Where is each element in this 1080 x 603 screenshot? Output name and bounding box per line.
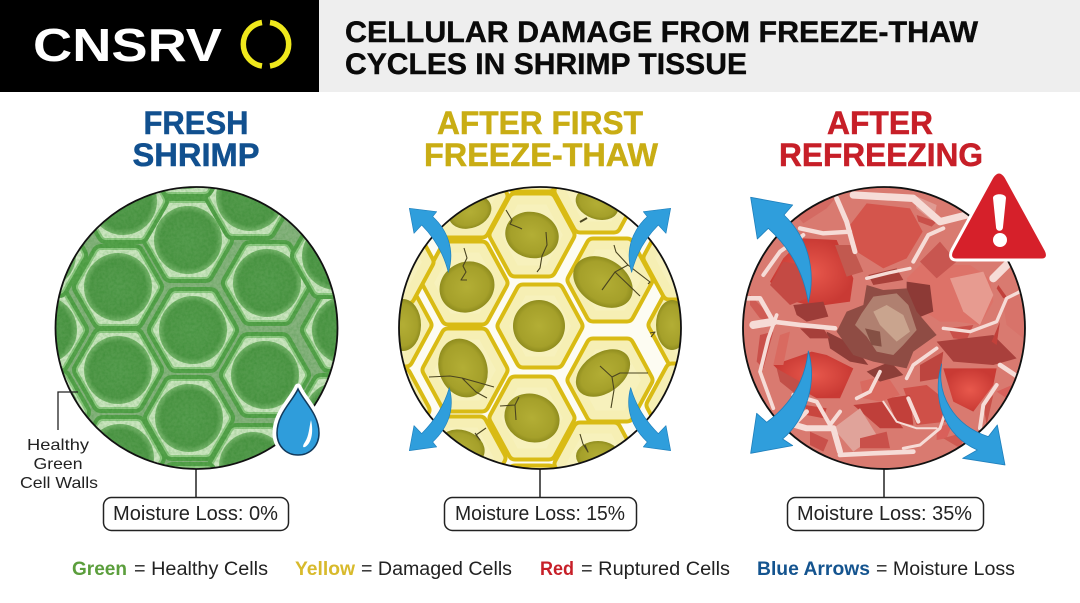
legend: green — [72, 559, 268, 580]
arrow: bottom right — [629, 388, 671, 451]
legend: green: Green — [72, 559, 127, 580]
icon: water drop — [276, 387, 320, 456]
legend: green: = Healthy Cells — [134, 559, 268, 580]
white fracture veins — [740, 195, 1027, 455]
panel: fresh shrimp — [20, 111, 338, 532]
label: healthy green cell walls: Cell Walls — [20, 475, 98, 492]
arrow: bottom right — [938, 364, 1005, 465]
arrow: bottom left — [751, 351, 811, 453]
panel: after refreezing — [740, 105, 1047, 530]
moisture loss arrows — [409, 208, 671, 451]
title: CELLULAR DAMAGE FROM FREEZE-THAW — [345, 16, 979, 49]
label: healthy green cell walls — [20, 437, 98, 492]
arrow: top right — [629, 208, 671, 272]
connector line — [195, 468, 197, 498]
heading: after first freeze-thaw — [424, 105, 659, 173]
heading: fresh shrimp — [132, 105, 260, 173]
legend: blue arrows: = Moisture Loss — [876, 559, 1015, 580]
central brown cell — [837, 285, 937, 368]
header bar — [0, 0, 1080, 92]
arrow: top left — [409, 208, 451, 272]
heading: fresh shrimp: FRESH — [144, 105, 248, 141]
label: healthy green cell walls: Green — [34, 456, 82, 473]
legend: yellow: = Damaged Cells — [361, 559, 512, 580]
legend: blue arrows: Blue Arrows — [757, 559, 870, 580]
legend: red: Red — [540, 559, 574, 580]
heading: after refreezing: REFREEZING — [779, 137, 983, 173]
heading: after refreezing: AFTER — [827, 105, 933, 141]
title — [345, 16, 979, 81]
heading: after first freeze-thaw: FREEZE-THAW — [424, 137, 659, 173]
cracks — [429, 210, 655, 452]
logo wordmark: CNSRV — [33, 19, 222, 71]
icon: warning triangle — [951, 172, 1047, 260]
moisture loss 35% — [788, 498, 984, 530]
healthy cells circle — [54, 186, 338, 470]
icon: logo brackets — [243, 22, 289, 66]
damaged cells circle — [398, 186, 682, 470]
heading: after first freeze-thaw: AFTER FIRST — [437, 105, 643, 141]
legend: yellow — [295, 559, 512, 580]
legend — [72, 559, 1015, 580]
moisture loss 15% — [444, 498, 636, 530]
legend: red: = Ruptured Cells — [581, 559, 730, 580]
arrow: bottom left — [409, 388, 451, 451]
callout leader: cell walls — [58, 392, 78, 430]
heading: after refreezing — [779, 105, 983, 173]
moisture loss 35%: Moisture Loss: 35% — [797, 503, 972, 525]
title: CYCLES IN SHRIMP TISSUE — [345, 48, 747, 81]
moisture loss arrows — [751, 197, 1005, 465]
panel: after first freeze-thaw — [398, 111, 682, 532]
arrow: top left — [751, 197, 811, 302]
damaged nuclei — [400, 193, 680, 463]
moisture loss 0% — [104, 498, 288, 530]
legend: yellow: Yellow — [295, 559, 355, 580]
moisture loss 0%: Moisture Loss: 0% — [113, 503, 278, 525]
heading: fresh shrimp: SHRIMP — [132, 137, 260, 173]
ruptured cells circle — [740, 185, 1030, 472]
label: healthy green cell walls: Healthy — [27, 437, 89, 454]
connector line — [883, 468, 885, 498]
legend: blue arrows — [757, 559, 1015, 580]
moisture loss 15%: Moisture Loss: 15% — [455, 503, 625, 525]
connector line — [539, 468, 541, 498]
red shards — [750, 195, 1024, 452]
